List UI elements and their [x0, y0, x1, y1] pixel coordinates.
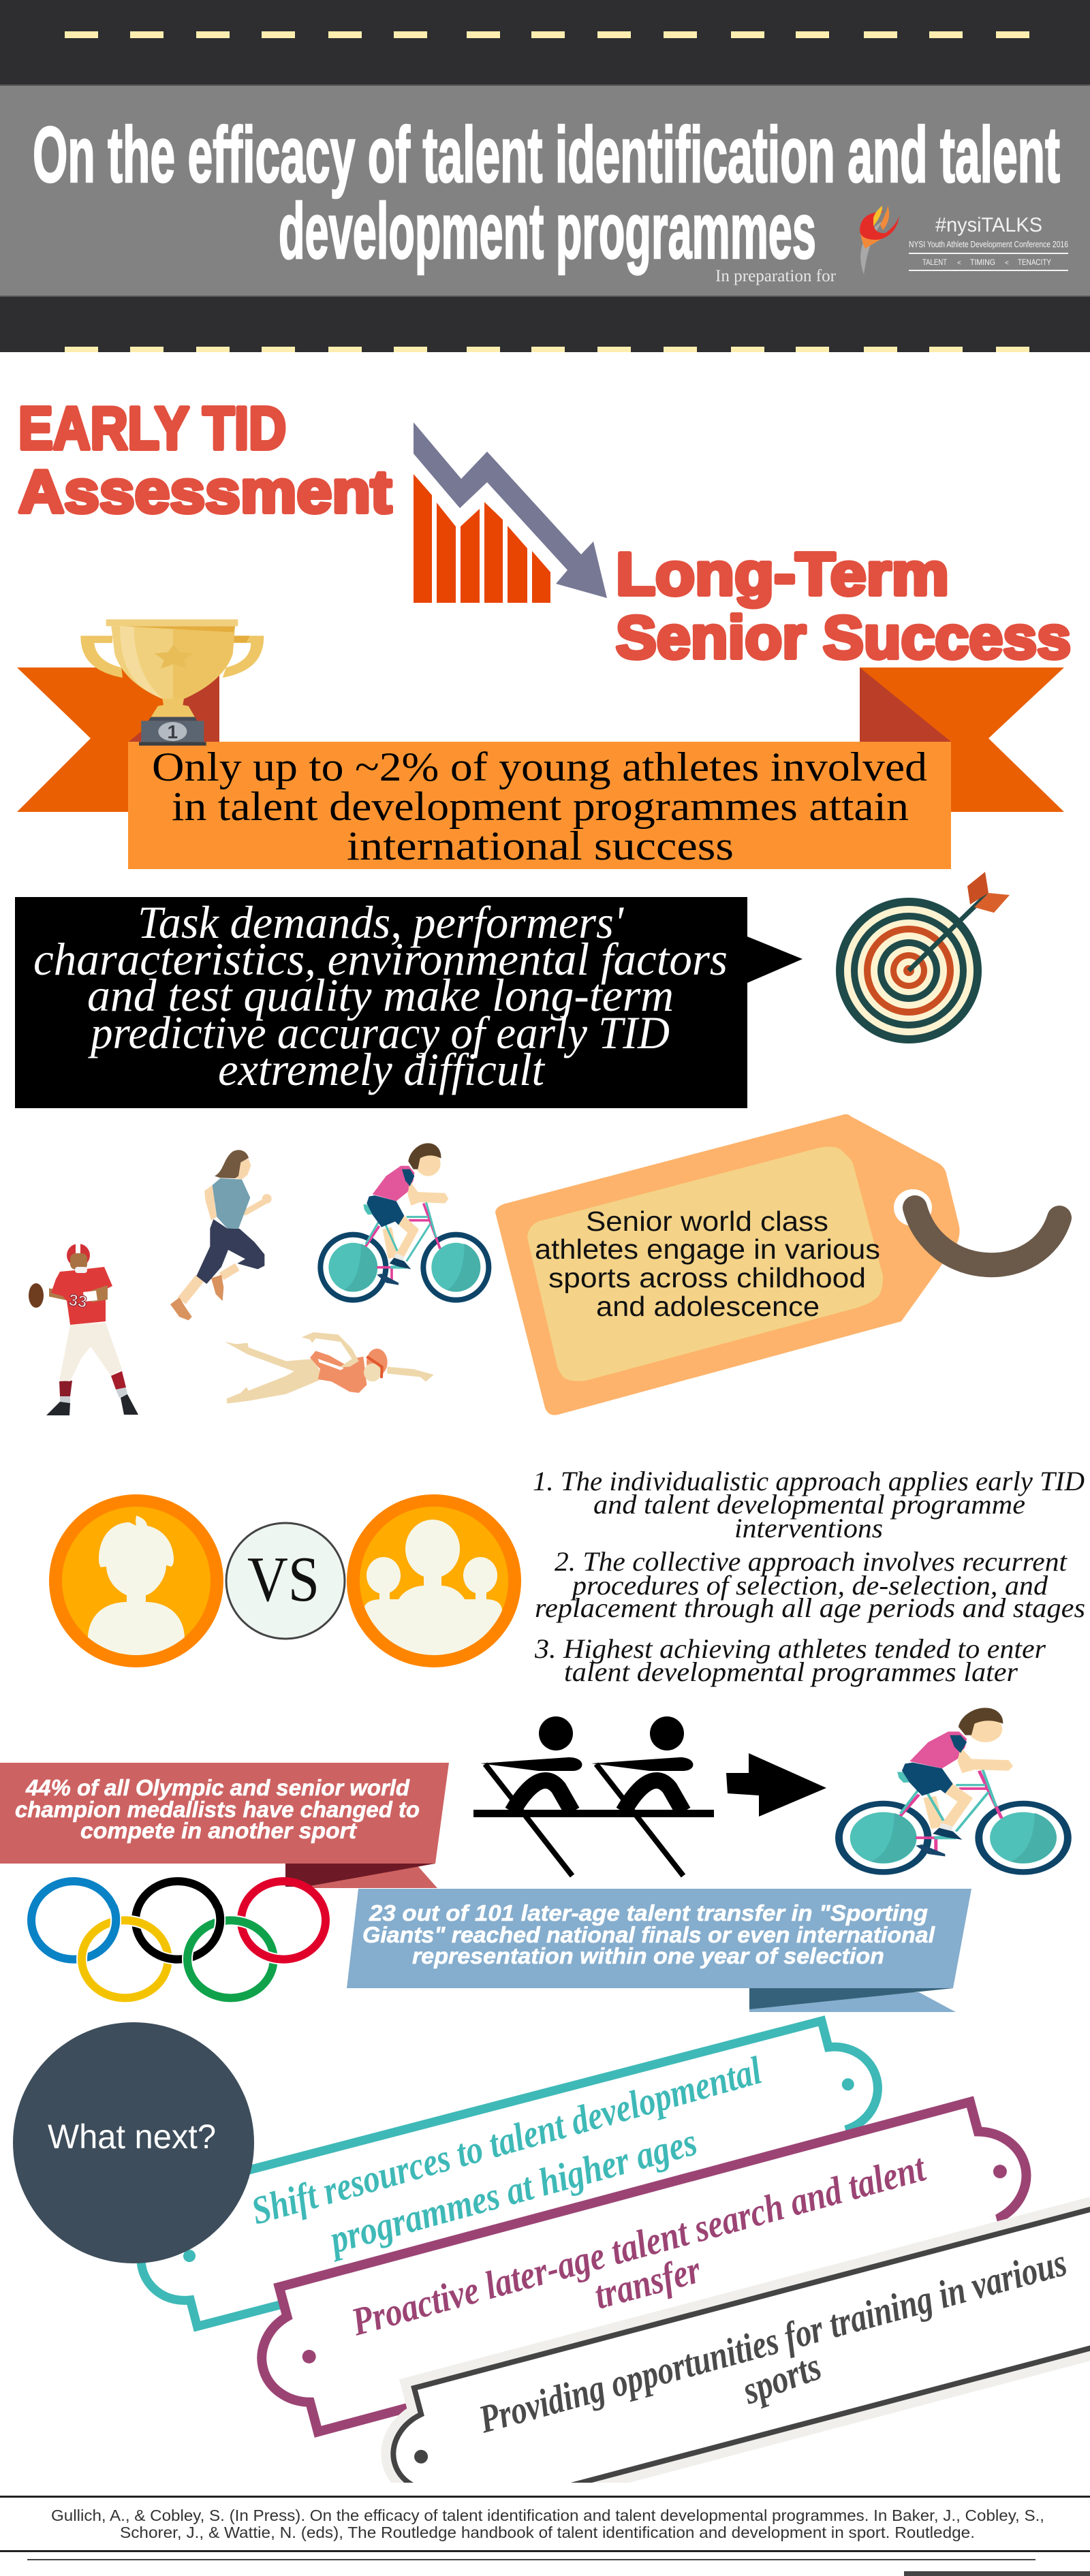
text: key findings list: procedures of selection, de-selection, and [570, 1570, 1048, 1601]
recommendation banner: later-age talent search: Proactive later-age talent search and talent [346, 2145, 931, 2344]
title [33, 110, 1060, 275]
text: key findings list: 3. Highest achieving athletes tended to enter [534, 1633, 1046, 1664]
text: key findings list: talent developmental programmes later [564, 1656, 1018, 1687]
recommendation banner: shift resources: programmes at higher ages [322, 2119, 702, 2263]
banner: sporting giants statistic: 23 out of 101 later-age talent transfer in "Sporting [369, 1900, 928, 1926]
icon: vs badge [226, 1523, 345, 1639]
conference branding text: TENACITY [1018, 257, 1051, 267]
reference footer [0, 2496, 1090, 2576]
badge: what next: What next? [48, 2118, 216, 2156]
text: key findings list: and talent developmental programme [593, 1489, 1025, 1520]
ribbon callout: 2 percent: in talent development programmes attain [172, 784, 909, 829]
conference branding text [909, 214, 1068, 271]
arrow: talent transfer [726, 1753, 826, 1817]
text: key findings list: 2. The collective approach involves recurrent [555, 1546, 1068, 1577]
text: key findings list: interventions [734, 1513, 883, 1543]
icon: rowers [473, 1716, 714, 1876]
heading: long-term senior success: Long-Term [616, 540, 949, 608]
ribbon callout: 2 percent: Only up to ~2% of young athletes involved [152, 744, 927, 789]
icon: target with arrow [836, 872, 1010, 1043]
heading: long-term senior success [616, 540, 1071, 671]
ribbon callout: 2 percent: international success [347, 823, 734, 868]
heading: early TID assessment [18, 394, 392, 525]
luggage tag callout: Senior world class [586, 1206, 828, 1237]
icon: group of athletes [347, 1494, 521, 1667]
illustration: cyclist [320, 1143, 488, 1300]
caption: in preparation for: In preparation for [715, 267, 837, 285]
header banner [0, 0, 1090, 352]
banner: 44 percent statistic [0, 1763, 449, 1888]
heading: early TID assessment: Assessment [18, 458, 392, 525]
callout: long-term predictive accuracy [15, 896, 803, 1108]
reference footer: Gullich, A., & Cobley, S. (In Press). On the efficacy of talent identification and talent developmental programmes. In Baker, J., Cobley, S., [51, 2507, 1044, 2524]
heading: early TID assessment: EARLY TID [18, 394, 286, 462]
callout: long-term predictive accuracy: Task demands, performers' [138, 896, 624, 948]
recommendation banner: training in various sports: sports [736, 2344, 826, 2413]
icon: NYSI flame logo [860, 206, 899, 274]
banner: sporting giants statistic: representation within one year of selection [412, 1943, 884, 1968]
conference branding text: < [1005, 260, 1009, 267]
illustration: football player: 33 [67, 1291, 88, 1312]
banner: sporting giants statistic [347, 1889, 971, 2012]
icon: vs badge: VS [247, 1544, 320, 1615]
callout: long-term predictive accuracy: characteristics, environmental factors [33, 933, 728, 985]
recommendation banner: shift resources: Shift resources to talent developmental [247, 2047, 766, 2233]
luggage tag callout: and adolescence [596, 1291, 820, 1322]
conference branding text: TIMING [970, 257, 995, 267]
conference branding text: < [957, 260, 961, 267]
recommendation banner: later-age talent search [244, 2092, 1044, 2441]
icon: individual athlete [49, 1494, 223, 1667]
luggage tag callout: athletes engage in various [535, 1234, 880, 1265]
heading: long-term senior success: Senior Success [616, 603, 1071, 671]
callout: long-term predictive accuracy: extremely difficult [218, 1043, 546, 1095]
luggage tag callout: sports across childhood [548, 1262, 866, 1293]
recommendation banner: later-age talent search: transfer [590, 2247, 705, 2318]
illustration: cyclist second [839, 1708, 1068, 1872]
banner: 44 percent statistic: champion medallists have changed to [15, 1797, 420, 1822]
badge: what next [13, 2022, 254, 2263]
ribbon callout: 2 percent [17, 667, 1064, 869]
recommendation banner: shift resources [125, 2011, 894, 2336]
icon: olympic rings [31, 1881, 326, 1998]
illustration: swimmer [225, 1332, 434, 1404]
text: key findings list: replacement through all age periods and stages [535, 1592, 1085, 1623]
reference footer: Schorer, J., & Wattie, N. (eds), The Routledge handbook of talent identification and development in sport. Routledge. [120, 2524, 975, 2541]
illustration: football player [29, 1243, 138, 1415]
chart: declining bars [414, 474, 550, 603]
conference branding text: #nysiTALKS [935, 214, 1042, 236]
icon: trophy [80, 619, 264, 746]
arrow: downward trend [414, 422, 607, 598]
icon: trophy: 1 [168, 721, 178, 742]
text: key findings list: 1. The individualistic approach applies early TID [533, 1466, 1085, 1496]
callout: long-term predictive accuracy: predictive accuracy of early TID [88, 1007, 670, 1058]
conference branding text: TALENT [922, 257, 948, 267]
text: key findings list [533, 1466, 1085, 1687]
callout: long-term predictive accuracy: and test quality make long-term [87, 969, 674, 1021]
luggage tag callout [495, 1114, 1059, 1415]
banner: sporting giants statistic: Giants" reached national finals or even international [362, 1922, 935, 1947]
illustration: runner [170, 1150, 272, 1320]
banner: 44 percent statistic: compete in another sport [80, 1818, 358, 1843]
banner: 44 percent statistic: 44% of all Olympic and senior world [25, 1775, 410, 1800]
